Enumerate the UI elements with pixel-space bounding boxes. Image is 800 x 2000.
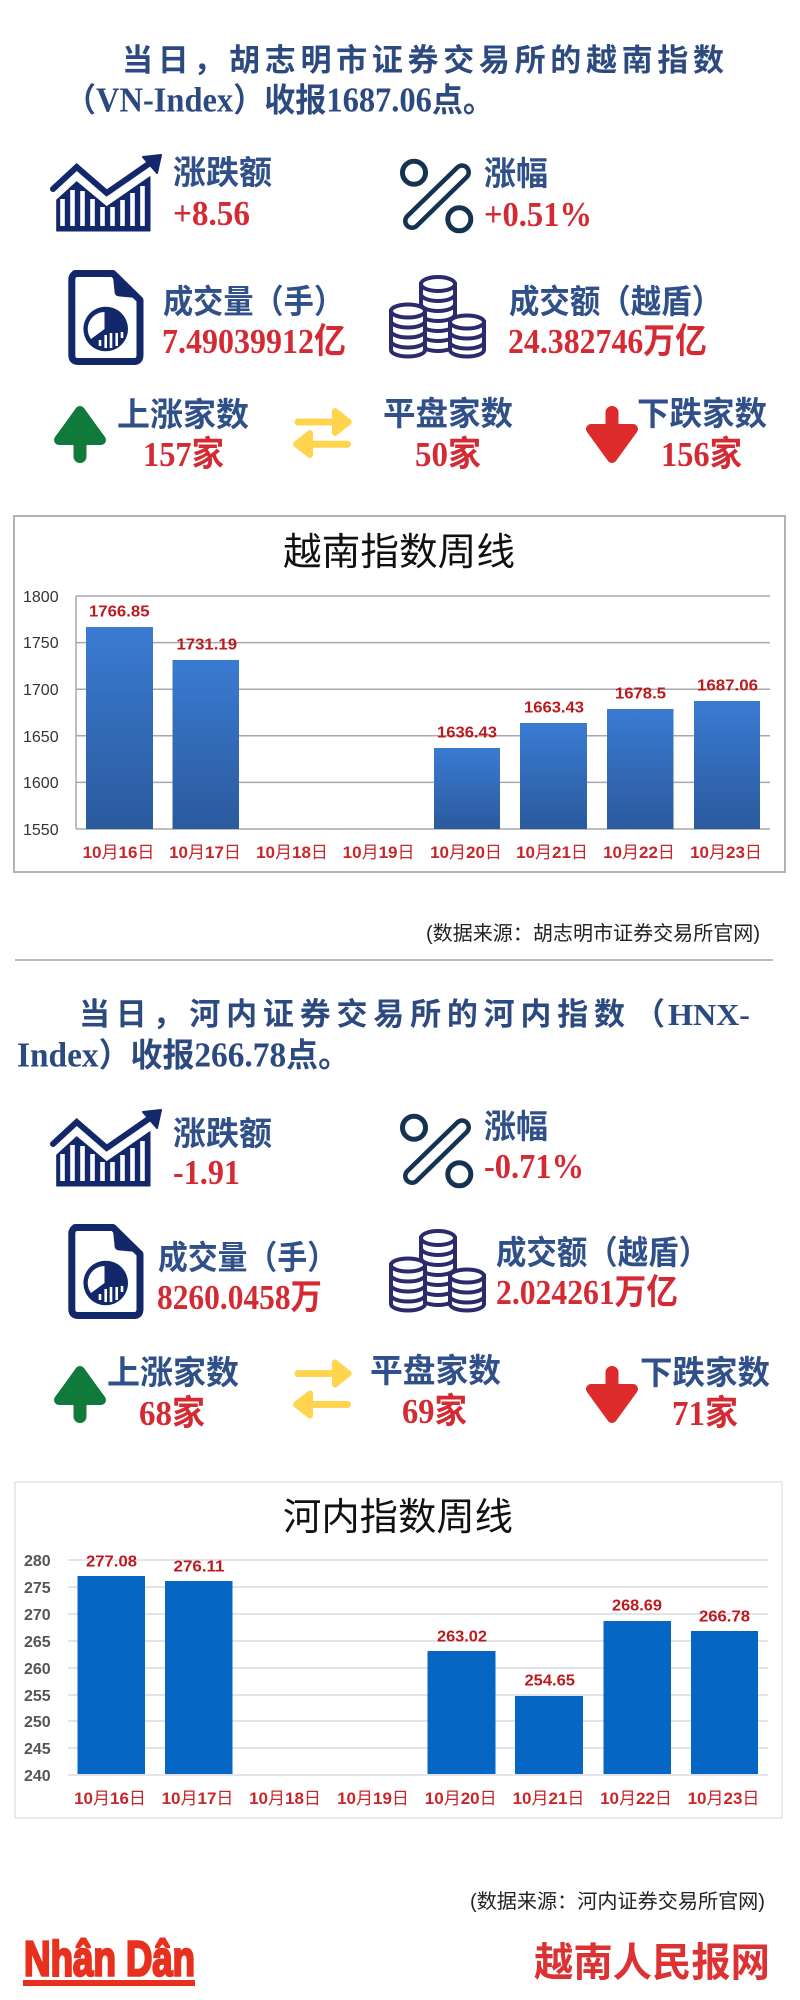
- y axis and grid: 260: [24, 1661, 51, 1678]
- value labels: 1766.85: [89, 604, 150, 620]
- y axis and grid: 255: [24, 1688, 51, 1705]
- x axis labels: 10月20日: [430, 843, 502, 862]
- label: volume: 成交量（手）: [163, 283, 344, 320]
- icon: down arrow: [591, 1372, 633, 1418]
- icon: up arrow: [59, 1371, 101, 1416]
- y axis and grid: [24, 1553, 768, 1785]
- label: decliners: 下跌家数: [640, 1354, 770, 1391]
- x axis labels: 10月23日: [688, 1789, 759, 1808]
- label: advancers: 上涨家数: [117, 396, 249, 433]
- y axis and grid: 1800: [23, 589, 59, 606]
- brand name: 越南人民报网: [534, 1941, 770, 1985]
- value labels: 268.69: [612, 1598, 662, 1614]
- label: turnover: 成交额（越盾）: [496, 1234, 709, 1271]
- value: decliners: 156家: [661, 435, 742, 474]
- value: volume: 8260.0458万: [157, 1278, 322, 1317]
- x axis labels: 10月19日: [337, 1789, 409, 1808]
- x axis labels: 10月22日: [603, 843, 675, 862]
- value: percent change: -0.71%: [484, 1147, 584, 1186]
- value: volume: 7.49039912亿: [162, 322, 346, 361]
- x axis labels: [83, 843, 762, 862]
- chart title: 越南指数周线: [283, 532, 515, 574]
- x axis labels: [74, 1789, 759, 1808]
- icon: coins: [391, 277, 484, 357]
- value labels: 254.65: [524, 1672, 575, 1690]
- x axis labels: 10月21日: [516, 843, 588, 862]
- x axis labels: 10月18日: [256, 843, 328, 862]
- y axis and grid: 275: [24, 1580, 51, 1597]
- label: percent change: 涨幅: [484, 1108, 548, 1145]
- y axis and grid: 1700: [23, 682, 59, 699]
- source note: HNX: (数据来源：河内证券交易所官网): [470, 1890, 765, 1913]
- value: change: +8.56: [173, 194, 250, 233]
- value: percent change: +0.51%: [484, 195, 592, 234]
- y axis and grid: 245: [24, 1741, 51, 1758]
- value labels: 1663.43: [524, 700, 584, 716]
- value labels: [86, 1554, 750, 1690]
- value labels: 263.02: [437, 1628, 487, 1646]
- x axis labels: 10月17日: [162, 1789, 233, 1808]
- label: change: 涨跌额: [173, 1115, 272, 1152]
- y axis and grid: 1750: [23, 635, 59, 652]
- x axis labels: 10月16日: [83, 843, 154, 862]
- chart title: 河内指数周线: [283, 1497, 513, 1539]
- x axis labels: 10月21日: [513, 1789, 584, 1808]
- value: turnover: 2.024261万亿: [496, 1273, 678, 1312]
- value labels: 1678.5: [615, 686, 666, 702]
- x axis labels: 10月22日: [600, 1789, 672, 1808]
- heading: VN-Index summary: [65, 43, 724, 120]
- value: advancers: 157家: [143, 435, 224, 474]
- icon: percent: [402, 1116, 471, 1186]
- heading: HNX-Index summary: 当日，河内证券交易所的河内指数: [79, 997, 625, 1032]
- value labels: [89, 604, 758, 742]
- label: change: 涨跌额: [173, 154, 272, 191]
- value: decliners: 71家: [672, 1394, 738, 1433]
- label: unchanged: 平盘家数: [370, 1352, 501, 1389]
- y axis and grid: 1600: [23, 775, 59, 792]
- icon: up arrow: [59, 411, 101, 456]
- value labels: 1687.06: [697, 678, 758, 694]
- logo: Nhan Dan: Dân: [126, 1932, 195, 1986]
- value labels: 266.78: [699, 1608, 750, 1626]
- value: change: -1.91: [173, 1153, 240, 1192]
- label: volume: 成交量（手）: [158, 1239, 337, 1276]
- x axis labels: 10月19日: [343, 843, 415, 862]
- icon: rising chart: [53, 155, 161, 231]
- y axis and grid: 265: [24, 1634, 51, 1651]
- panel: HNX-Index stats: [53, 1108, 770, 1433]
- panel: VN-Index stats: [53, 154, 767, 474]
- icon: percent: [402, 161, 471, 231]
- heading: VN-Index summary: 当日，胡志明市证券交易所的越南指数: [122, 43, 724, 78]
- y axis and grid: 240: [24, 1768, 51, 1785]
- heading: HNX-Index summary: [17, 997, 750, 1074]
- label: advancers: 上涨家数: [107, 1354, 239, 1391]
- y axis and grid: 1650: [23, 729, 59, 746]
- heading: HNX-Index summary: HNX-: [668, 997, 750, 1032]
- icon: swap arrows: [296, 411, 349, 455]
- x axis labels: 10月18日: [249, 1789, 321, 1808]
- value labels: 1636.43: [437, 724, 497, 742]
- label: turnover: 成交额（越盾）: [509, 283, 722, 320]
- value labels: 276.11: [174, 1558, 225, 1576]
- icon: document: [72, 272, 142, 362]
- heading: VN-Index summary: （VN-Index）收报1687.06点。: [65, 82, 494, 120]
- value: turnover: 24.382746万亿: [508, 322, 707, 361]
- logo: Nhan Dan: Nhân: [24, 1932, 116, 1986]
- panel: VN-Index weekly chart: [14, 516, 785, 872]
- value labels: 277.08: [86, 1554, 137, 1570]
- x axis labels: 10月20日: [425, 1789, 497, 1808]
- icon: swap arrows: [296, 1362, 349, 1416]
- x axis labels: 10月17日: [169, 843, 241, 862]
- icon: coins: [391, 1231, 484, 1310]
- icon: down arrow: [591, 412, 633, 458]
- y axis and grid: 1550: [23, 822, 59, 839]
- value labels: 1731.19: [176, 636, 237, 654]
- value: advancers: 68家: [139, 1394, 205, 1433]
- label: decliners: 下跌家数: [637, 395, 767, 432]
- icon: document: [72, 1226, 142, 1316]
- label: percent change: 涨幅: [484, 155, 548, 192]
- icon: rising chart: [53, 1110, 161, 1186]
- value: unchanged: 69家: [402, 1392, 467, 1431]
- y axis and grid: 280: [24, 1553, 51, 1570]
- value: unchanged: 50家: [415, 435, 481, 474]
- label: unchanged: 平盘家数: [383, 395, 513, 432]
- source note: HOSE: (数据来源：胡志明市证券交易所官网): [426, 922, 760, 945]
- y axis and grid: [23, 589, 770, 839]
- heading: HNX-Index summary: （: [634, 997, 665, 1032]
- x axis labels: 10月23日: [690, 843, 762, 862]
- y axis and grid: 250: [24, 1714, 51, 1731]
- panel: HNX-Index weekly chart: [15, 1482, 782, 1818]
- bars: [86, 627, 760, 829]
- bars: [78, 1576, 758, 1774]
- y axis and grid: 270: [24, 1607, 51, 1624]
- heading: HNX-Index summary: Index）收报266.78点。: [17, 1036, 350, 1074]
- x axis labels: 10月16日: [74, 1789, 146, 1808]
